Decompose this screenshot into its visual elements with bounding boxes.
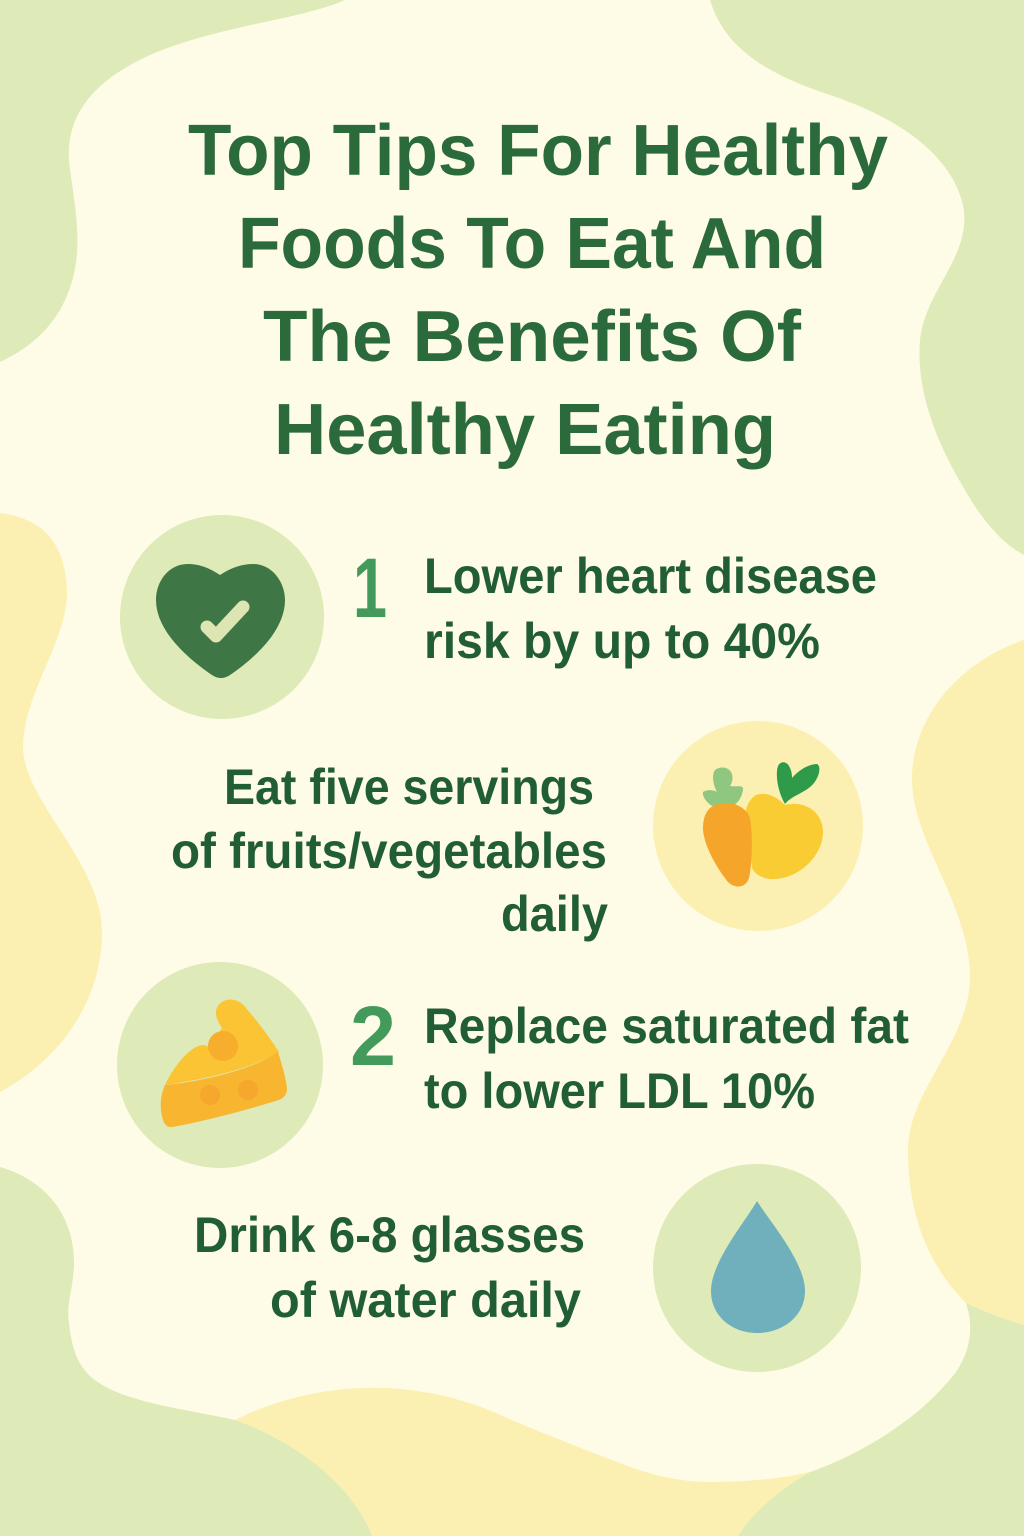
title xyxy=(188,111,888,470)
text: lower heart disease risk xyxy=(424,548,877,669)
background blob: left yellow xyxy=(0,513,102,1092)
tip 2: saturated fat xyxy=(117,962,909,1168)
background blob: top left green xyxy=(0,0,345,362)
text: drink water: Drink 6-8 glasses xyxy=(194,1207,585,1263)
background blob: top right green xyxy=(710,0,1024,555)
text: eat five servings: of fruits/vegetables xyxy=(171,823,607,879)
text: eat five servings xyxy=(171,759,608,942)
number 1: 1 xyxy=(353,541,387,635)
text: lower heart disease risk: Lower heart disease xyxy=(424,548,877,604)
icon: carrot and apple xyxy=(653,721,863,931)
number 2: 2 xyxy=(350,989,396,1083)
text: eat five servings: Eat five servings xyxy=(224,759,594,815)
background blob: bottom right green xyxy=(738,1303,1024,1536)
tip: fruits and vegetables xyxy=(171,721,863,942)
text: eat five servings: daily xyxy=(501,886,608,942)
text: replace saturated fat: to lower LDL 10% xyxy=(424,1063,815,1119)
title: Top Tips For Healthy xyxy=(188,111,888,191)
tip 1: heart health xyxy=(120,515,877,719)
title: Healthy Eating xyxy=(274,390,776,470)
text: drink water xyxy=(194,1207,585,1328)
background blob: bottom yellow xyxy=(235,1388,810,1536)
text: lower heart disease risk: risk by up to 40% xyxy=(424,613,820,669)
title: The Benefits Of xyxy=(263,297,802,377)
background blob: right yellow xyxy=(908,640,1024,1340)
text: drink water: of water daily xyxy=(270,1272,581,1328)
icon: heart with check xyxy=(120,515,324,719)
text: replace saturated fat: Replace saturated fat xyxy=(424,998,909,1054)
title: Foods To Eat And xyxy=(238,204,826,284)
text: replace saturated fat xyxy=(424,998,909,1119)
icon: water drop xyxy=(653,1164,861,1372)
tip: water xyxy=(194,1164,861,1372)
icon: cheese xyxy=(117,962,323,1168)
background blob: bottom left green xyxy=(0,1167,372,1536)
